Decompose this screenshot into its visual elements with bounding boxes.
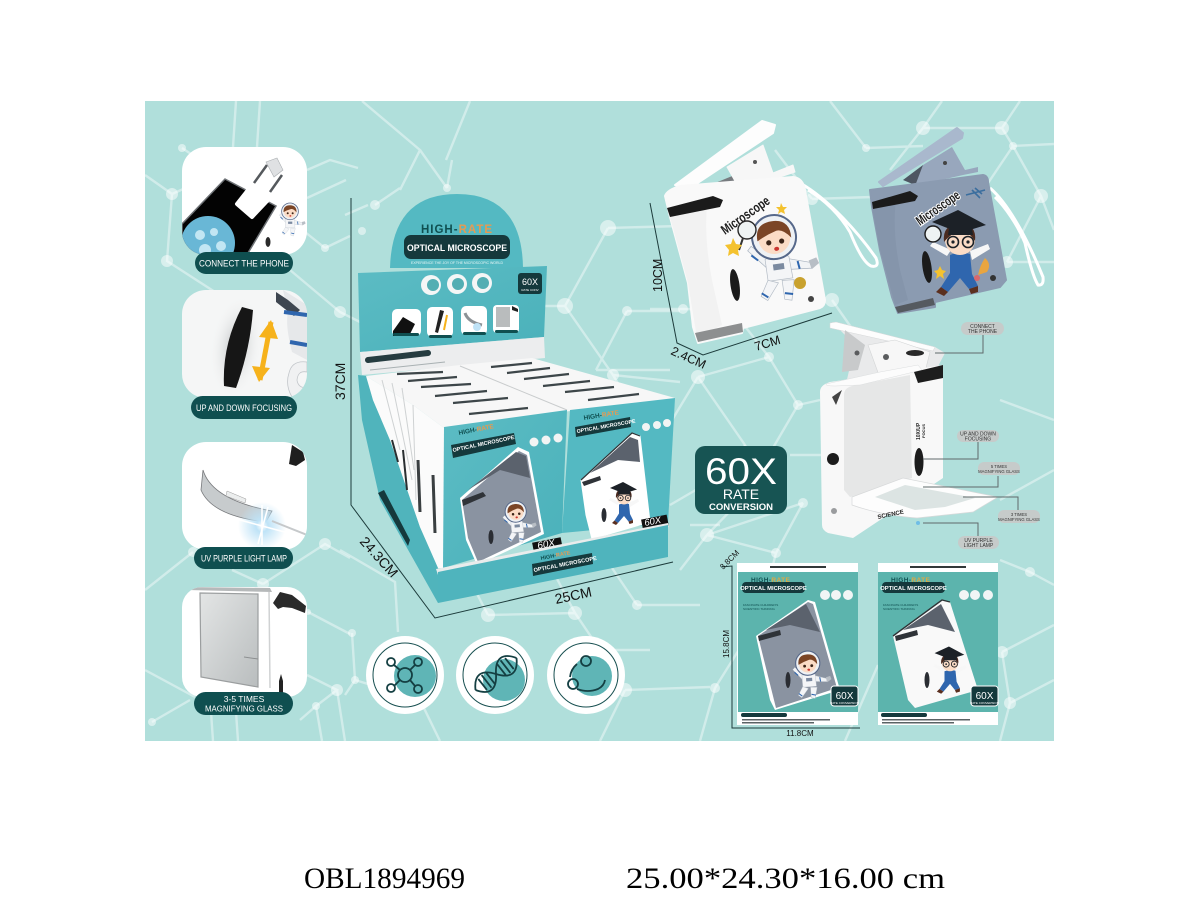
60X badge: RATE CONVERSION: [970, 701, 999, 705]
display back header: RATE CONV: [521, 288, 539, 292]
left box front: HIGH-RATE: [458, 423, 495, 437]
strap: [800, 183, 877, 266]
callout: up and down focusing: UP AND DOWN: [960, 432, 996, 438]
strap: [990, 188, 1043, 285]
left box front: [443, 410, 567, 568]
icon: molecule: [366, 636, 444, 714]
60X tag: [641, 515, 669, 531]
phone illustration: [182, 158, 306, 254]
label: 7CM: 7CM: [753, 333, 782, 354]
label: 10CM: 10CM: [651, 259, 665, 292]
tray front: HIGH-RATE: [540, 550, 571, 562]
callout: connect the phone: THE PHONE: [968, 329, 998, 335]
callout: 3 times magnifying glass: MAGNIFYING GLASS: [998, 517, 1040, 522]
product text: Microscope: [913, 187, 963, 228]
retail box: white product: HIGH-RATE: [891, 577, 930, 584]
white product on box: [581, 433, 650, 539]
feature tile: magnifying glass: [182, 587, 307, 715]
label: 2.4CM: 2.4CM: [669, 344, 708, 372]
product: white microscope: [665, 121, 877, 343]
display back header: 60X: [522, 277, 538, 287]
callout: UV purple light lamp: [958, 536, 999, 549]
badge: 60X rate conversion: CONVERSION: [709, 502, 773, 513]
left box front: OPTICAL MICROSCOPE: [452, 435, 516, 454]
carton dimensions: 25.00*24.30*16.00 cm: [626, 862, 945, 895]
label: UV purple light lamp: UV PURPLE LIGHT LAMP: [201, 554, 287, 564]
display back header: OPTICAL MICROSCOPE: [407, 243, 507, 253]
product: open microscope with callouts: FOCUS: [921, 424, 926, 438]
callout: 5 times magnifying glass: [978, 462, 1020, 475]
callout: UV purple light lamp: LIGHT LAMP: [964, 543, 994, 549]
label: 15.8CM: 15.8CM: [722, 630, 731, 658]
label: 3-5 times magnifying glass: MAGNIFYING GLASS: [205, 704, 283, 714]
callout: 5 times magnifying glass: MAGNIFYING GLASS: [978, 469, 1020, 474]
label: 3.8CM: 3.8CM: [718, 548, 741, 571]
feature tile: connect the phone: [181, 147, 307, 274]
box tops: [366, 358, 675, 428]
focus wheel and arrow illustration: [219, 290, 307, 396]
label: 3-5 times magnifying glass: [194, 692, 293, 715]
label: up and down focusing: UP AND DOWN FOCUSING: [196, 403, 292, 414]
left tray side: [358, 375, 438, 603]
retail box: white product: [878, 563, 999, 725]
retail box: white product: SCIENTIFIC THINKING: [883, 607, 915, 611]
retail box: white product: FASCINATE CHILDREN'S: [883, 603, 918, 607]
60X badge: 60X: [836, 691, 854, 702]
display back header: HIGH-RATE: [421, 224, 493, 236]
label: 3-5 times magnifying glass: 3-5 TIMES: [224, 694, 265, 704]
grey product: [756, 600, 840, 710]
retail box: grey product: FASCINATE CHILDREN'S: [743, 603, 778, 607]
product: open microscope with callouts: SCIENCE: [877, 510, 905, 521]
label: 11.8CM: 11.8CM: [786, 729, 814, 738]
retail box: grey product: OPTICAL MICROSCOPE: [740, 586, 807, 592]
60X badge: RATE CONVERSION: [830, 701, 859, 705]
feature tile: up and down focusing: [182, 290, 307, 419]
label: 37CM: 37CM: [332, 363, 348, 400]
display box: [358, 194, 675, 603]
label: 24.3CM: 24.3CM: [357, 533, 401, 580]
label: connect the phone: CONNECT THE PHONE: [199, 258, 289, 270]
icon: orbit atoms: [547, 636, 625, 714]
right box front: [562, 398, 675, 539]
callout lines: [923, 333, 1018, 537]
retail box: grey product: HIGH-RATE: [751, 577, 790, 584]
badge: 60X rate conversion: 60X: [705, 451, 777, 492]
60X badge: 60X: [976, 691, 994, 702]
tray front: [436, 523, 669, 603]
product: open microscope with callouts: 10X/UP: [916, 422, 922, 440]
callout: 3 times magnifying glass: 3 TIMES: [1011, 512, 1027, 517]
badge: 60X rate conversion: RATE: [723, 486, 759, 502]
retail box: white product: OPTICAL MICROSCOPE: [880, 586, 947, 592]
grey product on box: [460, 447, 544, 565]
glass frame: [852, 478, 998, 518]
retail box: grey product: [737, 563, 859, 725]
astronaut character: [725, 203, 824, 305]
dimension lines: display box: [332, 198, 673, 618]
callout: 5 times magnifying glass: 5 TIMES: [991, 464, 1007, 469]
product code: OBL1894969: [304, 862, 465, 895]
badge: 60X rate conversion: [695, 446, 787, 514]
dimension lines: white and blue product: [650, 203, 832, 372]
retail box: grey product: SCIENTIFIC THINKING: [743, 607, 775, 611]
callout: up and down focusing: FOCUSING: [965, 436, 991, 442]
60X badge: [970, 686, 999, 706]
box sides: [366, 376, 444, 568]
product: blue microscope: [870, 128, 1043, 313]
dimension lines: retail box: [718, 548, 860, 738]
60X tag: 60X: [643, 515, 663, 529]
right box front: HIGH-RATE: [583, 409, 620, 422]
callout: 3 times magnifying glass: [998, 510, 1040, 523]
right box front: OPTICAL MICROSCOPE: [576, 419, 637, 435]
icon: DNA: [456, 636, 534, 714]
display back header: EXPERIENCE THE JOY OF THE MICROSCOPIC WORLD: [411, 261, 503, 265]
glass panel illustration: [185, 587, 306, 697]
feature tile: UV purple light lamp: [182, 442, 307, 569]
callout: connect the phone: [961, 322, 1004, 335]
product: open microscope with callouts: [820, 322, 1040, 549]
display back header: [358, 194, 547, 375]
callout: UV purple light lamp: UV PURPLE: [964, 538, 993, 544]
tray front: OPTICAL MICROSCOPE: [533, 556, 598, 574]
clip: [832, 322, 945, 388]
product text: Microscope: [718, 193, 773, 237]
60X tag: 60X: [536, 538, 556, 552]
60X badge: [830, 686, 859, 706]
60X tag: [532, 537, 563, 556]
label: 25CM: 25CM: [553, 584, 593, 607]
callout: connect the phone: CONNECT: [970, 324, 995, 330]
body: [820, 365, 943, 538]
white product: [893, 600, 978, 708]
graduate character: [925, 188, 990, 296]
background panel with molecular network: [145, 101, 1054, 741]
callout: up and down focusing: [957, 430, 999, 442]
UV lamp illustration: [201, 445, 307, 550]
